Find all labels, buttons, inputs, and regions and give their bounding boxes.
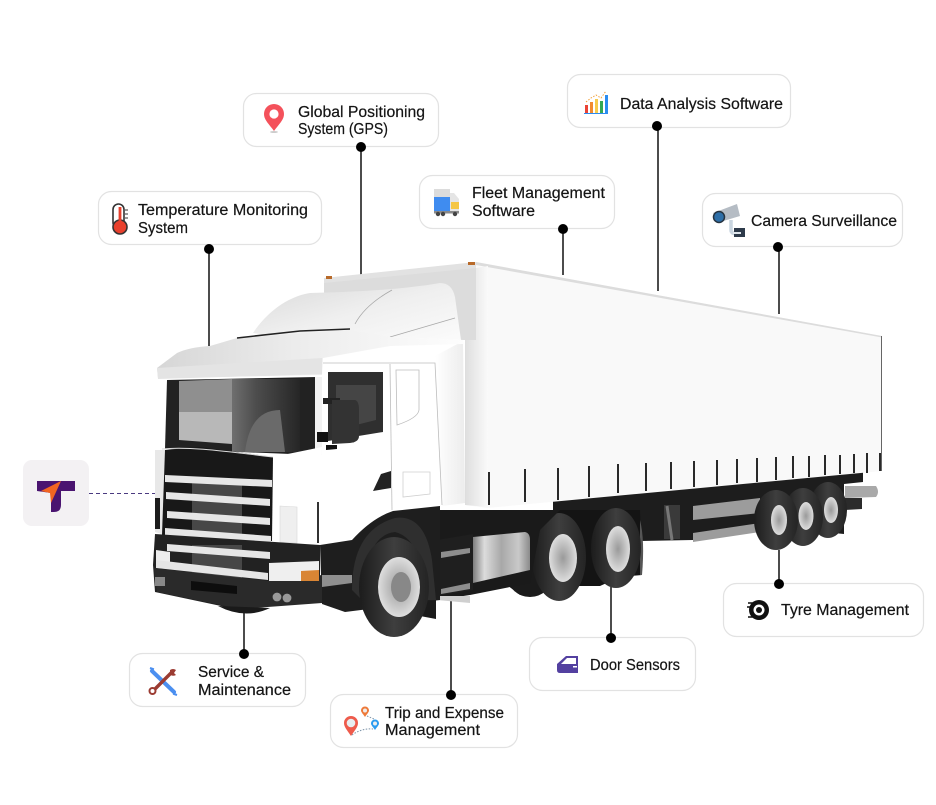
logo: T mark (37, 481, 75, 512)
icon: route pins (344, 706, 379, 736)
side mirror (317, 398, 359, 450)
label: Service & (198, 664, 265, 681)
cab body side (322, 337, 465, 545)
card: service and maintenance (130, 654, 306, 706)
truck illustration (153, 262, 882, 637)
grille (162, 447, 273, 544)
label: Trip and Expense (385, 705, 504, 722)
icon: thermometer (113, 204, 128, 234)
label: Management (385, 722, 481, 739)
icon: security camera (713, 204, 745, 237)
icon: delivery truck (434, 189, 459, 216)
label: Camera Surveillance (751, 213, 897, 230)
label (138, 202, 308, 237)
label: Maintenance (198, 682, 291, 699)
label (472, 185, 606, 220)
windshield (165, 377, 322, 455)
card: door sensors (530, 638, 696, 690)
trailer curtain straps (489, 453, 880, 505)
connector lines (209, 126, 779, 695)
card: GPS (244, 94, 438, 146)
logo connector dashed line (89, 492, 156, 494)
trailer wheels (754, 482, 847, 550)
label: Door Sensors (590, 657, 680, 674)
card: temperature monitoring (98, 192, 322, 244)
label: Software (472, 203, 535, 220)
connector dots (204, 121, 784, 700)
label: Data Analysis Software (620, 96, 783, 113)
front wheel and arch (352, 518, 436, 637)
label: Temperature Monitoring (138, 202, 308, 219)
logo tile (23, 460, 89, 526)
label (298, 104, 425, 138)
drive wheels (500, 508, 643, 601)
label (198, 664, 291, 699)
trailer box (324, 262, 882, 508)
card: data analysis (568, 74, 790, 128)
left front strip (155, 450, 166, 535)
steps and fuel tank (420, 510, 560, 619)
label: System (138, 220, 188, 237)
icon: car door (557, 656, 578, 673)
icon: map pin (264, 104, 284, 133)
icon: crossed tools (150, 668, 177, 695)
label (385, 705, 504, 739)
card: tyre management (724, 584, 924, 636)
label: Fleet Management (472, 185, 606, 202)
lower cab dark section (320, 506, 440, 612)
icon: tyre (747, 600, 769, 620)
card: trip and expense (330, 694, 518, 748)
cab roof fairing (253, 283, 461, 340)
front corner panel (270, 447, 322, 543)
cab roof (157, 329, 463, 379)
icon: bar chart (584, 91, 608, 114)
label: Global Positioning (298, 104, 425, 121)
card: fleet management (420, 176, 614, 228)
card: camera surveillance (702, 194, 902, 246)
label: System (GPS) (298, 121, 388, 138)
lower grille and bumper (153, 534, 352, 614)
trailer chassis (553, 472, 878, 542)
label: Tyre Management (781, 602, 910, 619)
